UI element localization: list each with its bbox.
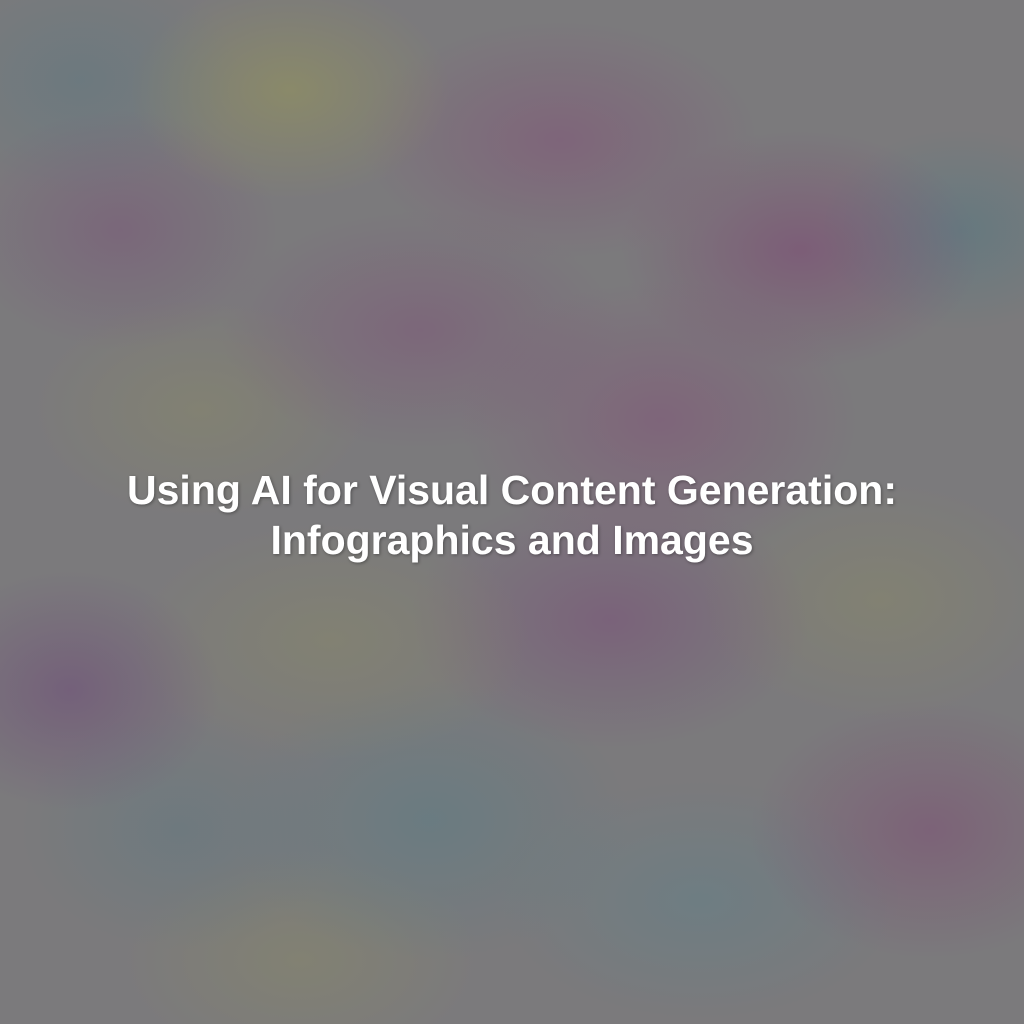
title [127,467,897,565]
title: Infographics and Images [270,517,754,563]
title: Using AI for Visual Content Generation: [127,467,897,513]
